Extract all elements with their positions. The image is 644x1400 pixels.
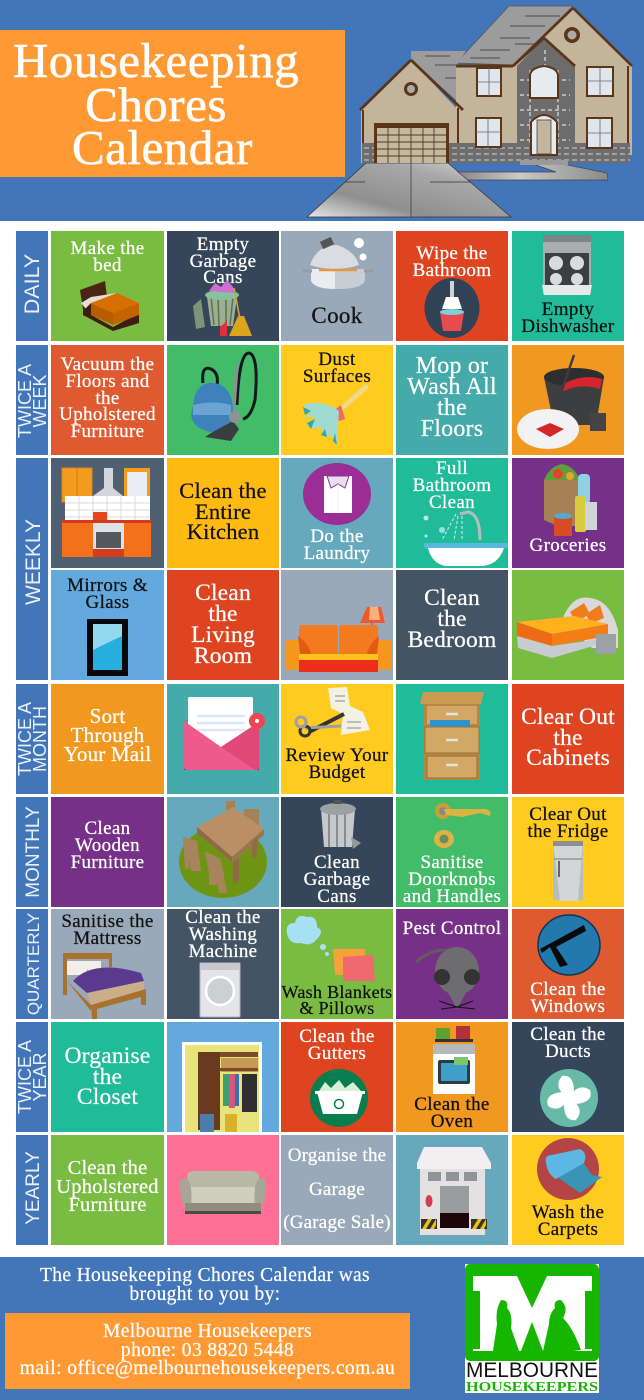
cell: empty dishwasher bbox=[512, 231, 624, 341]
cell: clean the bedroom bbox=[396, 570, 508, 680]
footer credit text: brought to you by: bbox=[130, 1284, 280, 1305]
text: Garbage bbox=[190, 250, 256, 272]
icon: mouse bbox=[396, 909, 508, 1019]
icon: oven bbox=[396, 1022, 508, 1132]
icon: mop bucket bbox=[517, 354, 606, 449]
header banner bbox=[0, 0, 644, 221]
text: Clean bbox=[424, 585, 480, 611]
row label: twice a week bbox=[16, 345, 48, 455]
text: Furniture bbox=[68, 1194, 147, 1216]
logo: Melbourne Housekeepers: MELBOURNE bbox=[466, 1359, 598, 1382]
cell: mop floors bbox=[396, 345, 508, 455]
text: Empty bbox=[197, 234, 249, 255]
text: the bbox=[437, 606, 467, 632]
cell: dining table bbox=[167, 797, 279, 907]
text bbox=[413, 458, 491, 513]
cell: clean the gutters bbox=[281, 1022, 393, 1132]
icon: door handle bbox=[396, 797, 508, 907]
text bbox=[408, 585, 496, 653]
text bbox=[59, 354, 156, 442]
cell: make the bed bbox=[51, 231, 164, 341]
cell: vacuum cleaner bbox=[167, 345, 279, 455]
text: Make the bbox=[70, 238, 145, 259]
row label: quarterly bbox=[16, 909, 48, 1019]
text: Clean the bbox=[414, 1094, 490, 1115]
text: Doorknobs bbox=[408, 869, 496, 890]
text: Groceries bbox=[530, 535, 606, 556]
icon: mirror bbox=[87, 619, 128, 676]
text: Through bbox=[71, 723, 144, 747]
cell: sanitise the mattress bbox=[51, 909, 164, 1019]
text: Machine bbox=[189, 941, 257, 962]
cell: clear out cabinets bbox=[512, 684, 624, 794]
icon: vacuum cleaner bbox=[191, 352, 258, 441]
text: Cabinets bbox=[526, 745, 610, 771]
text: Do the bbox=[310, 526, 364, 547]
text bbox=[304, 526, 370, 564]
text: the bbox=[553, 725, 583, 751]
contact text bbox=[5, 1323, 410, 1379]
house illustration bbox=[306, 6, 633, 218]
cell: filing cabinet bbox=[396, 684, 508, 794]
text: Furniture bbox=[71, 852, 144, 873]
text: Floors bbox=[421, 416, 483, 442]
contact text: Melbourne Housekeepers bbox=[103, 1321, 312, 1342]
text: Floors and bbox=[65, 371, 150, 392]
cell: garage building bbox=[396, 1135, 508, 1245]
text: Furniture bbox=[71, 421, 144, 442]
text: Mop or bbox=[416, 353, 488, 379]
icon: orange sofa and lamp bbox=[285, 607, 392, 672]
cell: sanitise doorknobs bbox=[396, 797, 508, 907]
icon: kitchen bbox=[62, 468, 151, 557]
text: and Handles bbox=[403, 886, 501, 907]
icon: shirt badge bbox=[303, 463, 371, 525]
text: Garage bbox=[309, 1178, 365, 1200]
text: the bbox=[95, 388, 120, 409]
row label: daily bbox=[16, 231, 48, 341]
icon: bed bbox=[80, 281, 139, 331]
text bbox=[304, 852, 370, 907]
text: the bbox=[437, 395, 467, 421]
cell: clean the washing machine bbox=[167, 909, 279, 1019]
text bbox=[512, 807, 624, 841]
text: Cook bbox=[311, 303, 363, 328]
cell: organise the garage bbox=[281, 1135, 393, 1245]
text: Gutters bbox=[308, 1043, 366, 1064]
cell: wash blankets and pillows bbox=[281, 909, 393, 1019]
cell: organise the closet bbox=[51, 1022, 164, 1132]
text: Empty bbox=[542, 299, 594, 320]
text: Room bbox=[194, 643, 252, 669]
row label: monthly bbox=[16, 797, 48, 907]
text: Upholstered bbox=[59, 404, 156, 425]
text: Garbage bbox=[304, 869, 370, 890]
text bbox=[191, 580, 255, 669]
text bbox=[521, 299, 615, 337]
icon: scissors and receipt bbox=[294, 687, 370, 738]
icon: envelope bbox=[184, 697, 265, 770]
text: Windows bbox=[531, 996, 605, 1017]
text: Glass bbox=[86, 592, 129, 613]
row label: yearly bbox=[16, 1135, 48, 1245]
icon: garage bbox=[396, 1135, 508, 1245]
text: Wooden bbox=[75, 835, 140, 856]
text: Cans bbox=[317, 886, 357, 907]
text: Wash Blankets bbox=[282, 982, 392, 1002]
text bbox=[167, 910, 279, 960]
icon: grocery bag bbox=[544, 464, 597, 536]
text: Clear Out bbox=[521, 704, 615, 730]
row label: daily: DAILY bbox=[20, 254, 44, 314]
text bbox=[190, 234, 256, 288]
footer panel bbox=[0, 1257, 644, 1400]
text: Pest Control bbox=[403, 918, 501, 939]
text: Laundry bbox=[304, 543, 370, 564]
text: the bbox=[208, 601, 238, 627]
text: Clean the bbox=[530, 1024, 606, 1045]
icon: metal bin bbox=[320, 800, 361, 849]
text bbox=[67, 575, 148, 613]
icon: grey sofa bbox=[167, 1135, 279, 1245]
cell: sofa bbox=[281, 570, 393, 680]
icon: mop and bucket badge bbox=[424, 278, 480, 338]
text: Bedroom bbox=[408, 627, 496, 653]
text: Washing bbox=[189, 924, 257, 945]
footer credit text: The Housekeeping Chores Calendar was bbox=[40, 1265, 370, 1286]
text bbox=[70, 238, 145, 276]
cell: cook bbox=[281, 231, 393, 341]
icon: washing machine bbox=[167, 909, 279, 1019]
text: Clean the bbox=[299, 1026, 375, 1047]
text: Vacuum the bbox=[61, 354, 154, 375]
cell: kitchen bbox=[51, 458, 164, 568]
cell: wash the carpets bbox=[512, 1135, 624, 1245]
text: Living bbox=[191, 622, 255, 648]
row label: twice a month bbox=[16, 684, 48, 794]
title panel bbox=[0, 30, 345, 177]
text: Mirrors & bbox=[67, 575, 148, 596]
cell: clear out the fridge bbox=[512, 797, 624, 907]
cell: mail bbox=[167, 684, 279, 794]
text bbox=[512, 982, 624, 1016]
text bbox=[51, 1046, 164, 1108]
cell: clean living room bbox=[167, 570, 279, 680]
contact text: mail: office@melbournehousekeepers.com.au bbox=[20, 1358, 395, 1379]
icon: dream cloud and pillows bbox=[281, 909, 393, 1019]
text bbox=[396, 1097, 508, 1131]
text bbox=[512, 1027, 624, 1061]
text: Clean bbox=[314, 852, 360, 873]
cell: clean kitchen bbox=[167, 458, 279, 568]
text: Sanitise bbox=[421, 852, 483, 873]
text bbox=[407, 353, 497, 442]
title text: Chores bbox=[85, 76, 227, 132]
title text: Housekeeping bbox=[13, 33, 299, 88]
cell: empty garbage cans bbox=[167, 231, 279, 341]
text: Full bbox=[436, 458, 468, 479]
logo: Melbourne Housekeepers bbox=[465, 1264, 599, 1393]
contact panel bbox=[5, 1313, 410, 1389]
text: Surfaces bbox=[303, 366, 371, 386]
text: Clean bbox=[84, 818, 131, 839]
text: Clean the bbox=[179, 478, 267, 503]
cell: wipe the bathroom bbox=[396, 231, 508, 341]
text bbox=[179, 478, 267, 544]
row label: weekly bbox=[16, 458, 48, 680]
icon: bathtub bbox=[424, 510, 508, 566]
text bbox=[285, 745, 389, 783]
text: Clean bbox=[429, 492, 475, 513]
cell: review your budget bbox=[281, 684, 393, 794]
cell: clean the oven bbox=[396, 1022, 508, 1132]
text: Clear Out bbox=[529, 804, 607, 825]
text: Kitchen bbox=[187, 519, 259, 544]
cell: clean wooden furniture bbox=[51, 797, 164, 907]
text: Organise bbox=[64, 1043, 150, 1069]
row label: quarterly: QUARTERLY bbox=[24, 913, 43, 1015]
cell: clean the windows bbox=[512, 909, 624, 1019]
text: Entire bbox=[195, 499, 251, 524]
cell: clean the ducts bbox=[512, 1022, 624, 1132]
text: Bathroom bbox=[413, 260, 491, 281]
text: Clean the bbox=[68, 1157, 147, 1179]
icon: gutter badge bbox=[281, 1022, 393, 1132]
contact text: phone: 03 8820 5448 bbox=[121, 1340, 294, 1361]
cell: clean garbage cans bbox=[281, 797, 393, 907]
icon: closet bbox=[167, 1022, 279, 1132]
title text: Calendar bbox=[72, 120, 253, 175]
text bbox=[281, 985, 393, 1016]
text: Wash All bbox=[407, 374, 497, 400]
text: Cans bbox=[203, 267, 243, 288]
text: Oven bbox=[431, 1111, 473, 1132]
text: the Fridge bbox=[527, 821, 609, 842]
text: Organise the bbox=[288, 1145, 386, 1166]
footer credit text bbox=[0, 1266, 410, 1304]
cell: mop and bucket bbox=[512, 345, 624, 455]
text bbox=[303, 349, 371, 386]
text: Dust bbox=[318, 349, 356, 370]
text: Ducts bbox=[545, 1041, 591, 1062]
cell: mirrors and glass bbox=[51, 570, 164, 680]
icon: garbage and broom bbox=[193, 280, 252, 336]
text: Wash the bbox=[532, 1202, 604, 1223]
text: bed bbox=[93, 255, 122, 276]
cell: closet bbox=[167, 1022, 279, 1132]
text: Sanitise the bbox=[61, 911, 154, 932]
icon: dishwasher bbox=[542, 235, 592, 295]
icon: wooden table on green disc bbox=[179, 801, 267, 898]
cell: sort your mail bbox=[51, 684, 164, 794]
text: Upholstered bbox=[56, 1176, 159, 1198]
cell: clean upholstered furniture bbox=[51, 1135, 164, 1245]
text: Carpets bbox=[538, 1219, 598, 1240]
row label: weekly: WEEKLY bbox=[22, 519, 45, 605]
text bbox=[413, 243, 491, 281]
cell: pest control bbox=[396, 909, 508, 1019]
text: Dishwasher bbox=[521, 316, 615, 337]
text: Your Mail bbox=[64, 742, 151, 766]
icon: orange bed bbox=[517, 598, 618, 658]
cell: bedroom bbox=[512, 570, 624, 680]
text bbox=[71, 818, 144, 873]
icon: carpet roll bbox=[512, 1135, 624, 1245]
text bbox=[512, 1205, 624, 1239]
title text bbox=[13, 33, 299, 175]
cell: do the laundry bbox=[281, 458, 393, 568]
text: (Garage Sale) bbox=[283, 1212, 391, 1233]
text bbox=[521, 704, 615, 771]
cell: armchair sofa bbox=[167, 1135, 279, 1245]
text: Sort bbox=[90, 704, 125, 728]
text bbox=[396, 855, 508, 905]
cell: vacuum floors bbox=[51, 345, 164, 455]
text: Bathroom bbox=[413, 475, 491, 496]
icon: steaming pot bbox=[303, 236, 373, 289]
text: Clean the bbox=[530, 979, 606, 1000]
text: Mattress bbox=[73, 928, 142, 949]
icon: wooden bed bbox=[51, 909, 164, 1019]
icon: feather duster bbox=[303, 384, 368, 445]
row label: monthly: MONTHLY bbox=[23, 806, 44, 898]
text: the bbox=[93, 1064, 122, 1090]
row label: yearly: YEARLY bbox=[23, 1151, 44, 1225]
text: & Pillows bbox=[299, 998, 375, 1018]
text bbox=[281, 1029, 393, 1063]
text: Closet bbox=[77, 1084, 138, 1110]
icon: fan badge bbox=[512, 1022, 624, 1132]
text: Budget bbox=[308, 762, 366, 783]
icon: squeegee bbox=[512, 909, 624, 1019]
icon: wooden drawers bbox=[420, 692, 484, 780]
cell: groceries bbox=[512, 458, 624, 568]
icon: fridge bbox=[512, 797, 624, 907]
cell: dust surfaces bbox=[281, 345, 393, 455]
text bbox=[281, 1139, 393, 1240]
text bbox=[64, 704, 151, 766]
row label: twice a year bbox=[16, 1022, 48, 1132]
text: Wipe the bbox=[416, 243, 488, 264]
text bbox=[51, 914, 164, 948]
text: Review Your bbox=[285, 745, 389, 766]
text: Clean bbox=[195, 580, 251, 606]
cell: full bathroom clean bbox=[396, 458, 508, 568]
text bbox=[51, 1159, 164, 1214]
